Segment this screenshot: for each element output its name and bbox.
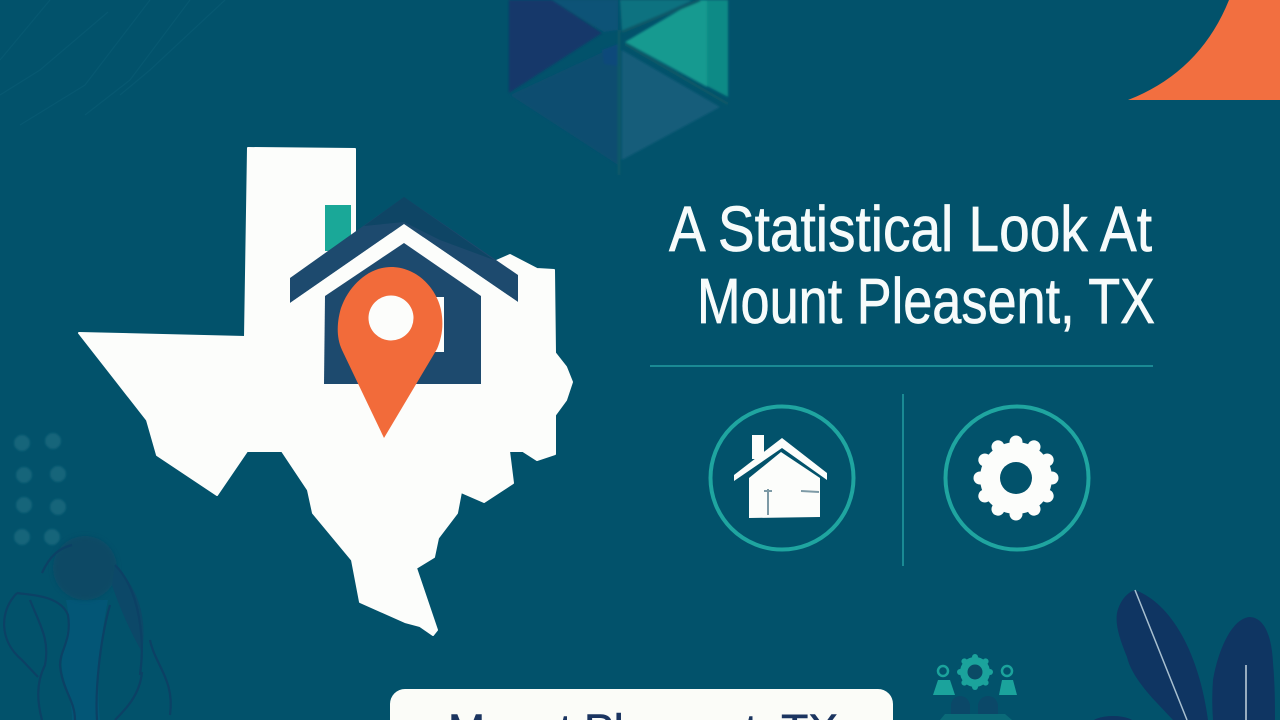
horizontal divider [650,365,1153,367]
geometric hexagon emblem [509,0,728,175]
house window [420,297,444,352]
plant dark bulb [53,536,117,600]
hexagon lower right facet [622,50,720,160]
icon: house in circle [710,406,854,550]
team right person [999,666,1017,695]
hexagon small navy accent [602,44,618,66]
decorative plant, bottom left [4,536,171,720]
pin body [338,267,442,438]
house icon cracks [764,489,819,515]
pill background [390,689,893,720]
house white roof band [290,224,518,303]
bottom label pill [390,689,893,720]
title line 2: Mount Pleasent, TX [697,265,1155,337]
house icon chimney [752,435,764,459]
gear icon ring [946,406,1088,550]
house roof [290,197,518,303]
leaf left vein [1135,590,1187,720]
hexagon navy facet [509,0,602,93]
house roof shadow [364,197,494,260]
gear icon cog [974,436,1058,520]
house graphic [290,197,518,384]
hexagon centre seam [619,0,728,175]
hexagon top right facet [620,0,693,32]
icon: gear in circle [946,406,1088,550]
title [669,193,1155,337]
vertical divider [902,394,904,566]
team seated figures [951,696,998,714]
leaf left [1117,590,1208,720]
team gear [957,654,993,690]
leaf right vein [1245,665,1247,720]
decorative leaves, bottom right [1091,590,1275,720]
teal bar on map [325,205,351,251]
plant dark leaf [112,565,144,652]
plant outlines [4,545,171,720]
icon: team with gear [933,654,1017,720]
hexagon top left facet [552,0,618,32]
hexagon lower left facet [510,45,618,165]
title line 1: A Statistical Look At [669,193,1152,265]
house body [324,243,481,384]
leaf right [1212,617,1275,720]
Texas map silhouette [79,148,572,635]
pin centre [368,296,414,340]
orange corner shape [1128,0,1280,100]
team left person [933,666,955,695]
plant lighter fill [62,600,108,720]
hexagon teal strip [707,0,728,97]
house icon ring [710,406,854,550]
hexagon teal facet [625,0,707,87]
decorative dots [14,433,66,545]
house icon roof [734,438,827,481]
location pin [338,267,442,438]
house icon body [749,452,820,518]
team base [940,714,1012,720]
faint contour lines, top left [0,0,225,125]
leaf small bump [1091,716,1135,720]
